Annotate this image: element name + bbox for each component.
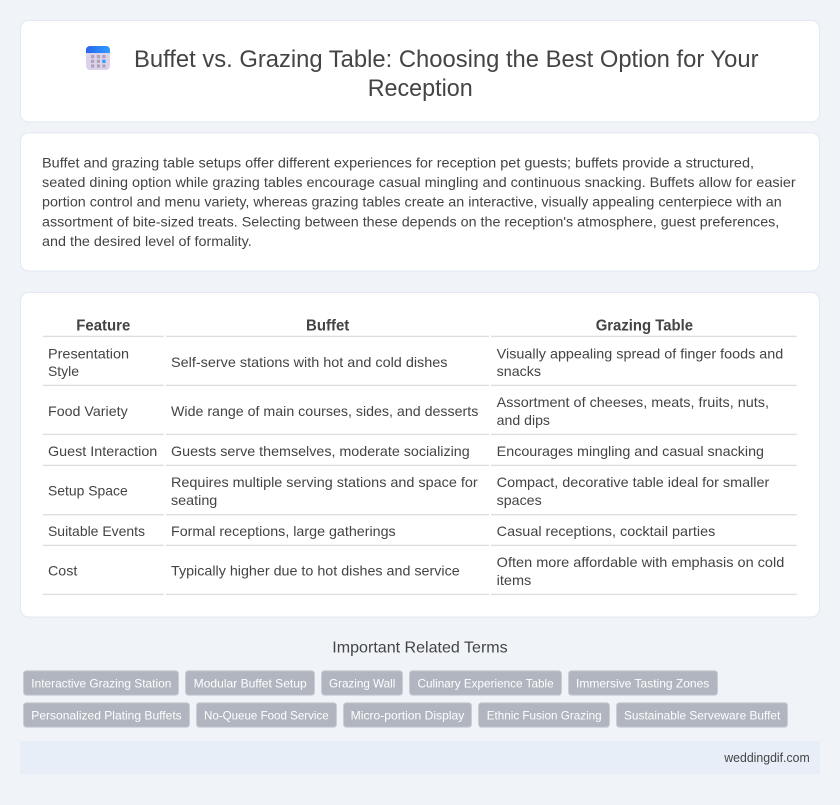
panel: description — [20, 133, 820, 271]
row: food variety: Food Variety — [48, 403, 128, 419]
description text: portion control and menu variety, whereas grazing tables create an interactive, visually appealing centerpiece with an — [42, 194, 782, 210]
row: setup space: Requires multiple serving stations and space for — [171, 474, 478, 490]
row: presentation style: Style — [48, 363, 79, 379]
tag: Sustainable Serveware Buffet — [624, 708, 781, 722]
tag: Grazing Wall — [329, 676, 395, 690]
title: Buffet vs. Grazing Table: Choosing the Best Option for Your — [134, 46, 758, 73]
row: food variety: and dips — [497, 412, 550, 428]
row: setup space: Compact, decorative table ideal for smaller — [497, 474, 770, 490]
description text: seated dining option while grazing tables encourage casual mingling and continuous snacking. Buffets allow for easier — [42, 174, 796, 190]
row: setup space: spaces — [497, 492, 542, 508]
tag — [568, 671, 718, 695]
row: presentation style: Presentation — [48, 345, 129, 361]
description text: assortment of bite-sized treats. Selecting between these depends on the reception's atmosphere, guest preferences, — [42, 213, 779, 229]
row: guest interaction: Guest Interaction — [48, 443, 157, 459]
row: setup space: seating — [171, 492, 217, 508]
title: Reception — [368, 75, 473, 102]
tag — [24, 703, 190, 727]
tag — [24, 671, 178, 695]
tag: Micro-portion Display — [351, 708, 464, 722]
row: suitable events: Suitable Events — [48, 523, 145, 539]
row: guest interaction: Guests serve themselves, moderate socializing — [171, 443, 470, 459]
row: presentation style: Self-serve stations with hot and cold dishes — [171, 354, 448, 370]
footer: weddingdif.com — [723, 750, 810, 765]
table header: Grazing Table — [596, 318, 693, 334]
row: presentation style — [48, 345, 783, 379]
tag — [196, 703, 336, 727]
tag: Personalized Plating Buffets — [31, 708, 182, 722]
row: suitable events: Formal receptions, large gatherings — [171, 523, 396, 539]
table header: Buffet — [306, 318, 350, 334]
tag — [344, 703, 472, 727]
row: suitable events: Casual receptions, cocktail parties — [497, 523, 715, 539]
row: food variety — [48, 394, 769, 428]
row: cost: items — [497, 572, 531, 588]
row: cost: Typically higher due to hot dishes and service — [171, 563, 460, 579]
tag — [616, 703, 788, 727]
row: food variety: Wide range of main courses, sides, and desserts — [171, 403, 478, 419]
description text: Buffet and grazing table setups offer different experiences for reception pet guests; buffets provide a structured, — [42, 154, 754, 170]
icon: calendar — [86, 46, 110, 70]
heading: important related terms: Important Related Terms — [332, 640, 508, 657]
row: cost: Often more affordable with emphasis on cold — [497, 554, 784, 570]
description text — [42, 154, 796, 249]
row: presentation style: snacks — [497, 363, 541, 379]
title — [134, 46, 758, 102]
row: guest interaction — [48, 443, 764, 459]
row: suitable events — [48, 523, 715, 539]
footer — [20, 741, 820, 775]
tag: Modular Buffet Setup — [194, 676, 307, 690]
tags: related terms — [24, 671, 788, 727]
row: presentation style: Visually appealing spread of finger foods and — [497, 345, 783, 361]
tag — [186, 671, 314, 695]
description text: and the desired level of formality. — [42, 233, 252, 249]
panel: comparison table — [20, 292, 820, 617]
table header: Feature — [76, 318, 130, 334]
tag: No-Queue Food Service — [204, 708, 329, 722]
row: setup space — [48, 474, 770, 508]
tag: Culinary Experience Table — [418, 676, 554, 690]
panel: header — [20, 20, 820, 122]
tag: Interactive Grazing Station — [31, 676, 171, 690]
table header — [76, 318, 693, 334]
row: setup space: Setup Space — [48, 483, 128, 499]
tag — [478, 703, 610, 727]
row: guest interaction: Encourages mingling and casual snacking — [497, 443, 764, 459]
row: cost — [48, 554, 784, 588]
tag — [410, 671, 562, 695]
row: cost: Cost — [48, 563, 77, 579]
tag: Immersive Tasting Zones — [576, 676, 709, 690]
tag: Ethnic Fusion Grazing — [487, 708, 602, 722]
row: food variety: Assortment of cheeses, meats, fruits, nuts, — [497, 394, 769, 410]
tag — [322, 671, 402, 695]
